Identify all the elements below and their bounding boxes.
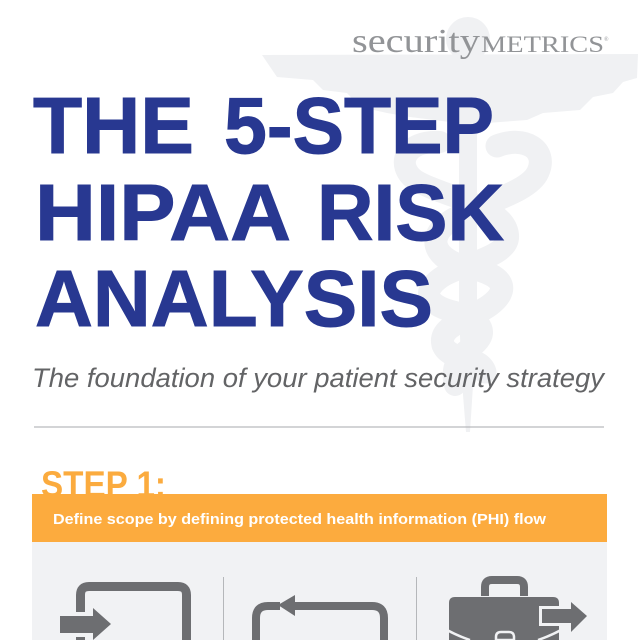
watermark: caduceus <box>262 17 638 432</box>
logo: SecurityMetrics: METRICS <box>481 32 604 57</box>
icon: briefcase with arrow <box>447 580 591 640</box>
step 1 panel <box>32 542 607 640</box>
title: ANALYSIS <box>35 254 433 343</box>
title <box>33 81 504 343</box>
subtitle: The foundation of your patient security strategy <box>32 363 606 393</box>
title: HIPAA <box>35 168 291 257</box>
step 1 heading: STEP 1: <box>41 464 166 505</box>
logo: SecurityMetrics: ® <box>604 36 609 43</box>
icon: loop arrow <box>256 595 384 640</box>
title: THE <box>33 81 194 170</box>
logo: SecurityMetrics <box>352 23 609 60</box>
step 1 banner: Define scope by defining protected health information (PHI) flow <box>53 512 547 528</box>
logo: SecurityMetrics: security <box>352 23 480 60</box>
title: RISK <box>317 168 504 257</box>
step 1 banner <box>32 494 607 542</box>
title: 5-STEP <box>224 81 494 170</box>
icon: arrow into box <box>60 586 186 640</box>
